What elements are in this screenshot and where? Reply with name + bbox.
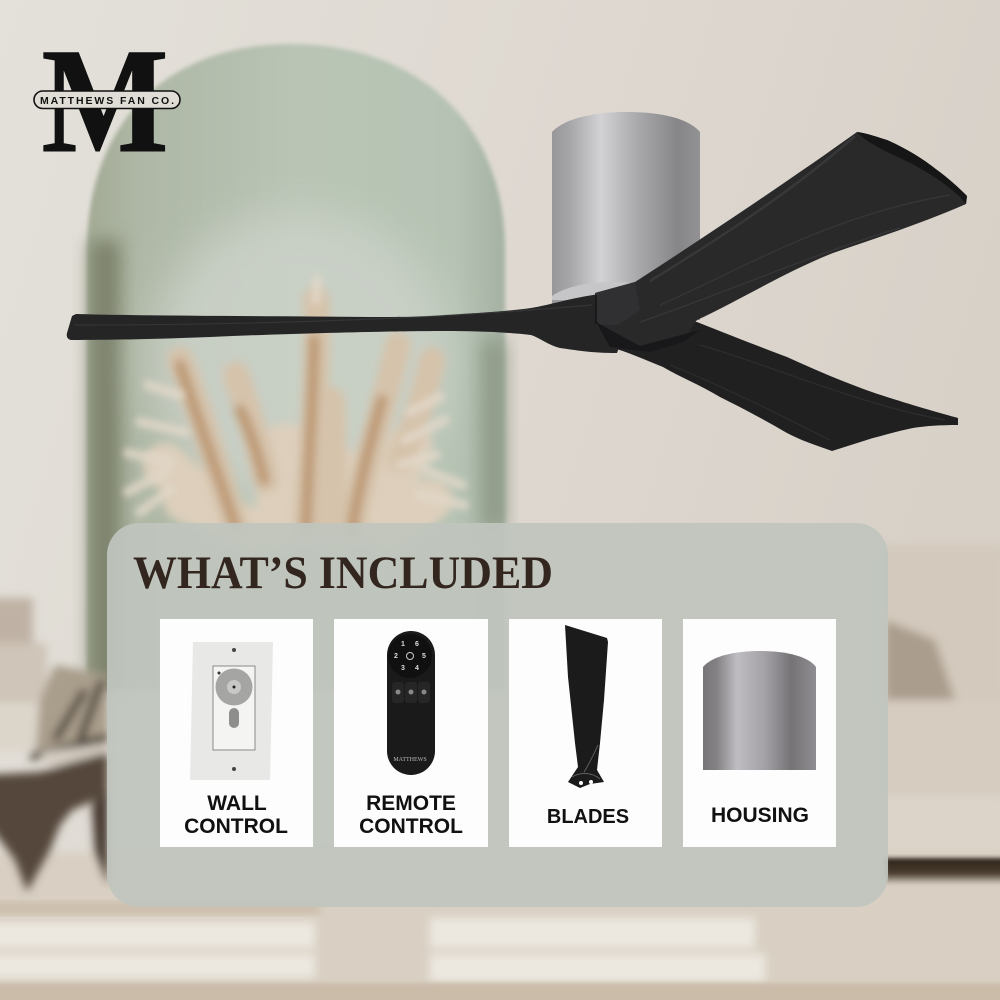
icon: remote: 1 — [401, 641, 405, 648]
panel: what's included — [107, 523, 888, 907]
pampas grass — [128, 280, 464, 530]
label: CONTROL — [184, 815, 288, 838]
icon: remote: 6 — [415, 641, 419, 648]
icon: remote: 2 — [394, 653, 398, 660]
card: wall control — [160, 619, 313, 847]
icon: remote: MATTHEWS — [393, 757, 427, 763]
blade: upper right — [595, 132, 967, 348]
icon: remote: 5 — [422, 653, 426, 660]
sofa right — [880, 545, 1000, 860]
icon: remote — [387, 631, 435, 775]
card: remote control — [334, 619, 488, 847]
label: REMOTE — [366, 792, 456, 815]
logo: Matthews Fan Co.: MATTHEWS FAN CO. — [40, 95, 174, 107]
logo: Matthews Fan Co.: M — [42, 18, 168, 184]
blade tip shading — [857, 132, 967, 204]
icon: housing cylinder — [703, 651, 816, 770]
icon: blade — [565, 625, 608, 788]
icon: wall control — [190, 642, 273, 780]
arch niche — [87, 44, 505, 690]
label: WALL — [207, 792, 267, 815]
label: CONTROL — [359, 815, 463, 838]
fan housing — [552, 112, 700, 320]
wood grain — [74, 136, 950, 440]
icon: remote: 3 — [401, 665, 405, 672]
blade: lower right — [610, 322, 958, 451]
card: blades — [509, 619, 662, 847]
left chair and throw — [0, 598, 108, 892]
icon: remote: 4 — [415, 665, 419, 672]
floor light stripes — [0, 918, 765, 982]
label: HOUSING — [711, 804, 809, 827]
ceiling fan — [67, 112, 967, 451]
card: housing — [683, 619, 836, 847]
heading: WHAT’S INCLUDED — [133, 547, 553, 599]
floor — [0, 852, 1000, 1000]
blade: left — [67, 294, 620, 353]
label: BLADES — [547, 806, 629, 828]
hub — [595, 282, 640, 325]
